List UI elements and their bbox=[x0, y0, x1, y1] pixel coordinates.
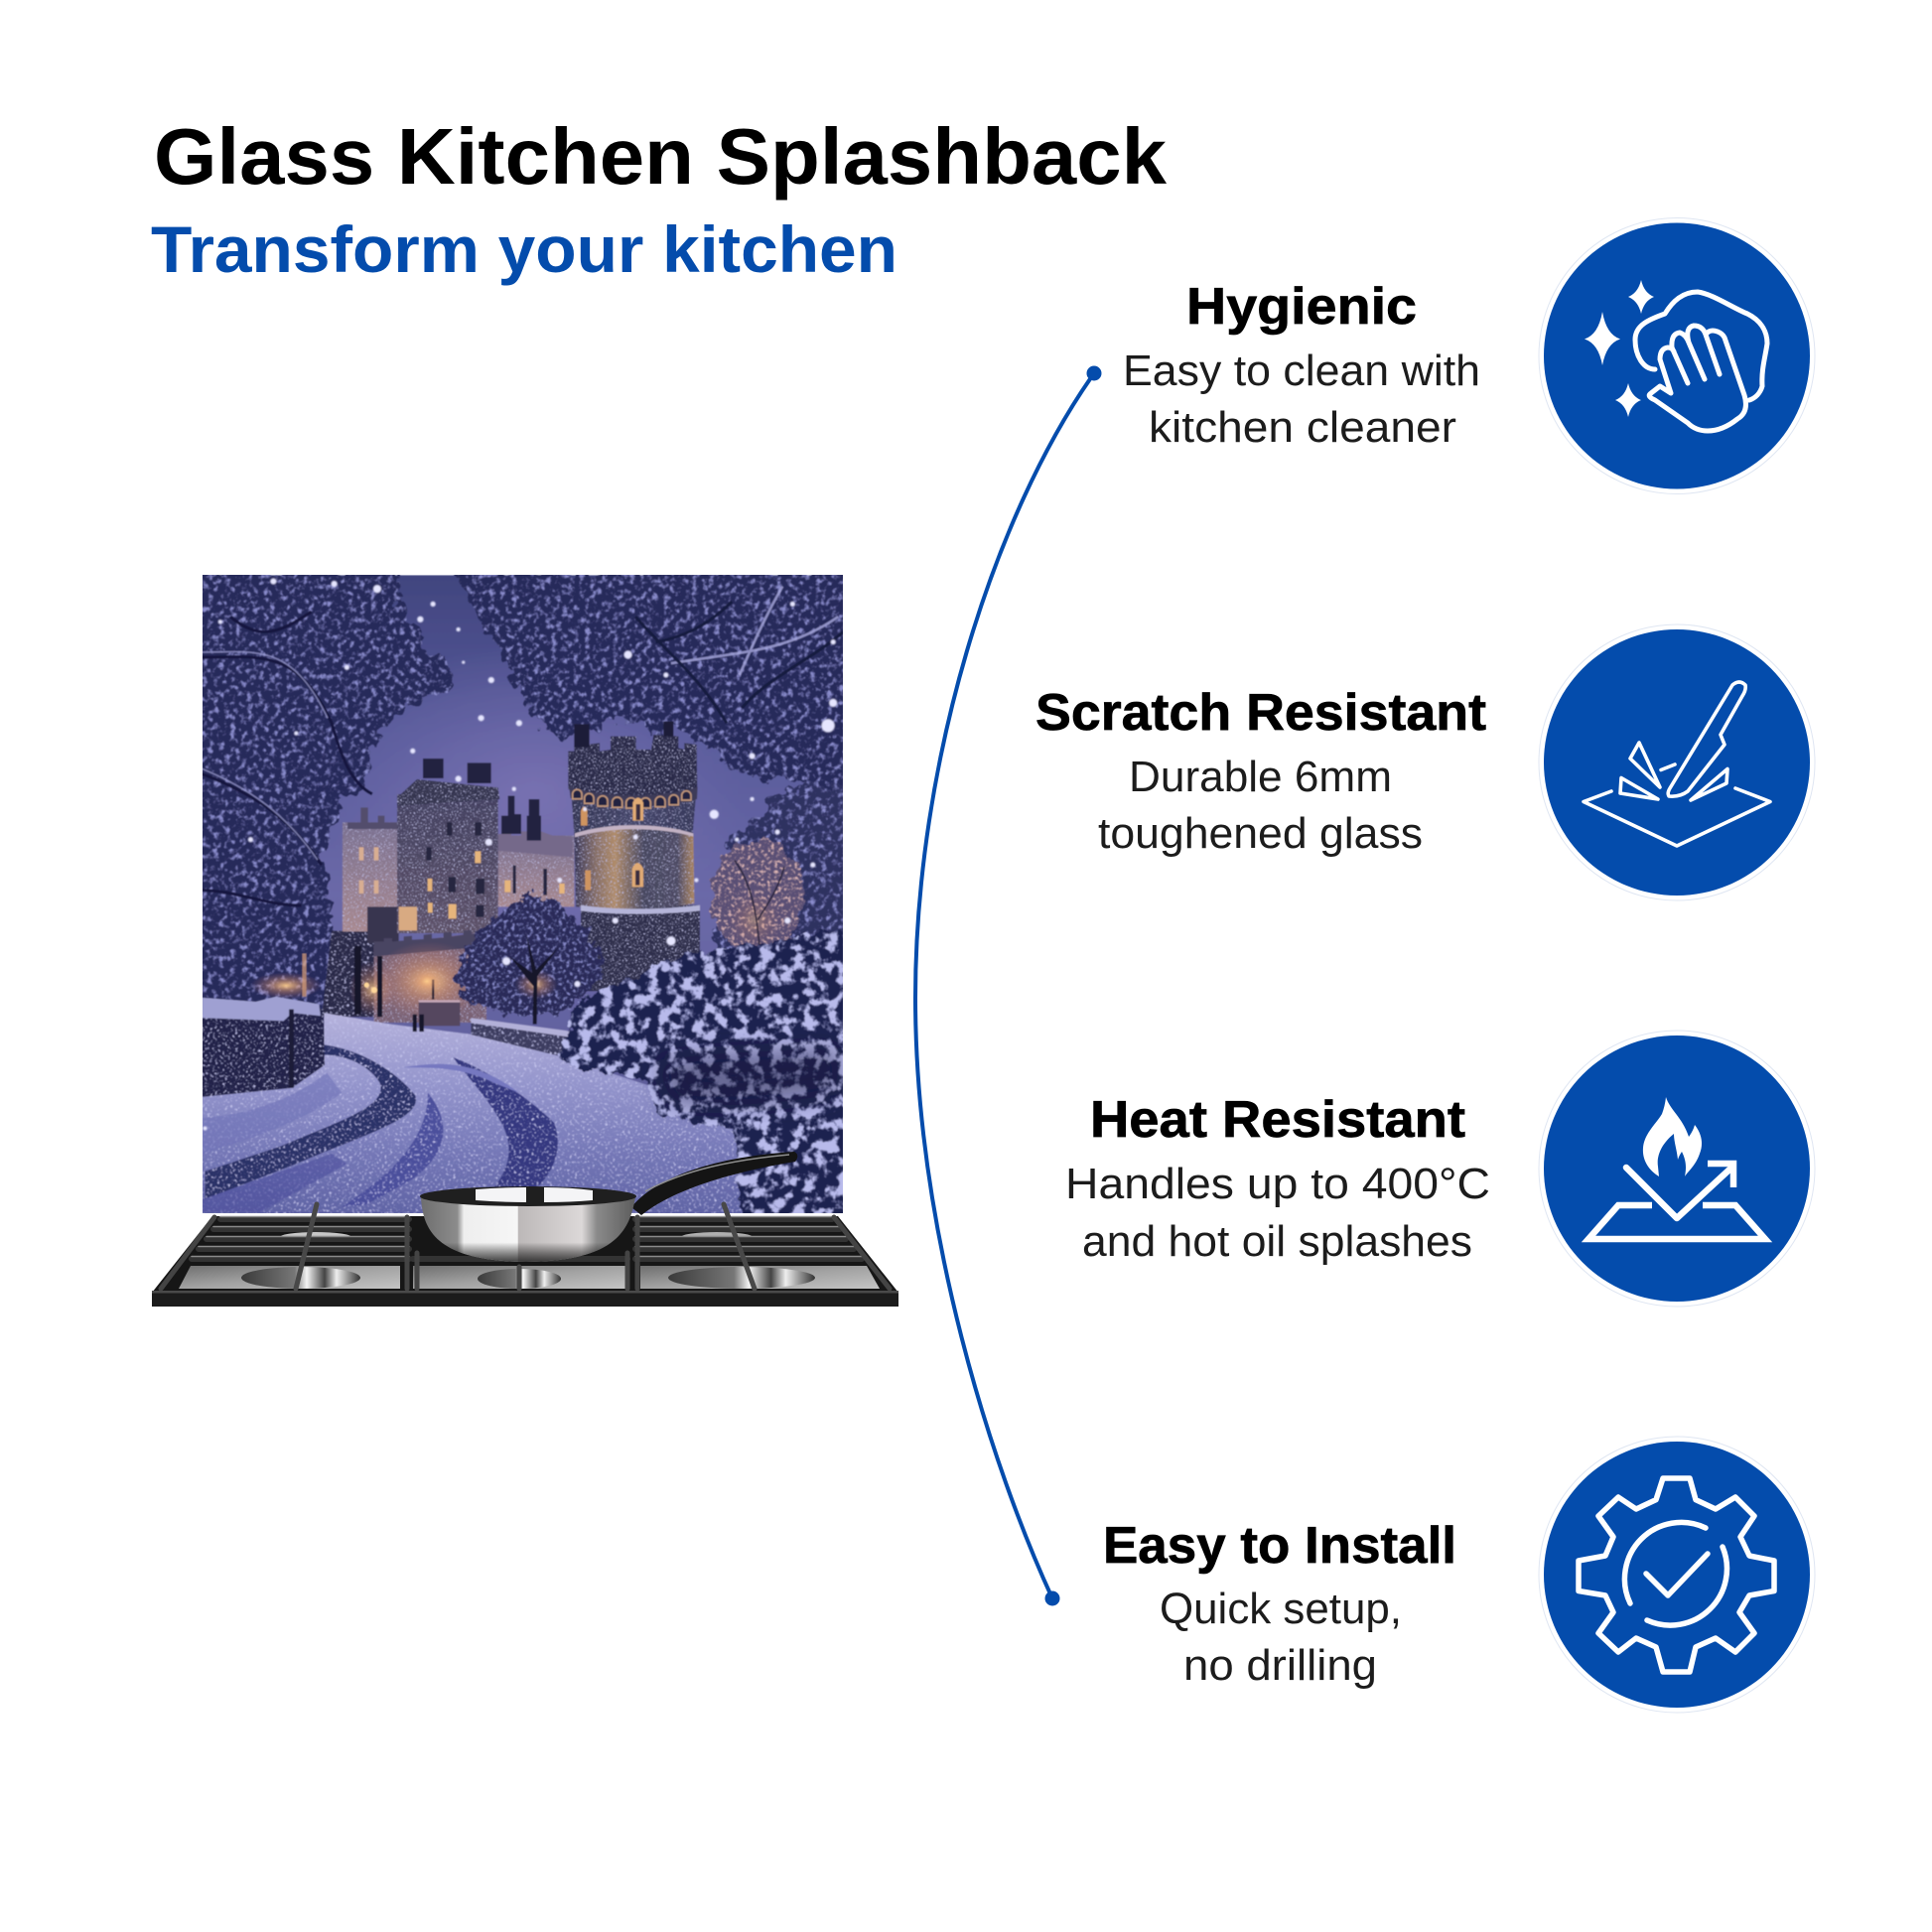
burners bbox=[241, 1232, 815, 1289]
falling snowflakes bbox=[203, 578, 837, 1131]
gas hob bbox=[152, 1204, 898, 1307]
lamps bbox=[250, 946, 395, 1017]
feature: easy to install text: no drilling bbox=[1183, 1641, 1377, 1690]
title: Glass Kitchen Splashback bbox=[154, 112, 1168, 201]
foreground tree bbox=[412, 894, 603, 1025]
steel burner plates bbox=[179, 1266, 880, 1289]
feature: easy to install text: Quick setup, bbox=[1160, 1585, 1402, 1633]
splashback photo: snowy castle bbox=[195, 571, 854, 1219]
feature: heat resistant text bbox=[1065, 1091, 1490, 1266]
people on road bbox=[413, 1015, 424, 1032]
feature: scratch resistant text: Durable 6mm bbox=[1129, 753, 1392, 801]
product image: splashback behind a gas hob bbox=[152, 571, 898, 1307]
castle bbox=[343, 722, 700, 1026]
grate bars bbox=[161, 1204, 890, 1289]
feature: easy to install text bbox=[1103, 1517, 1456, 1690]
lit tree right bbox=[712, 839, 804, 955]
feature: hygienic text: Easy to clean with bbox=[1123, 346, 1480, 395]
feature: hygienic text bbox=[1123, 278, 1480, 452]
feature: scratch resistant text bbox=[1035, 684, 1486, 858]
icon: gear with checkmark bbox=[1539, 1437, 1815, 1713]
frying pan bbox=[420, 1152, 797, 1262]
icon: hand wiping with sparkles bbox=[1539, 218, 1815, 494]
front edge bbox=[152, 1293, 898, 1307]
icon: flame on glass surface bbox=[1539, 1031, 1815, 1307]
subtitle: Transform your kitchen bbox=[151, 212, 897, 286]
feature: scratch resistant text: toughened glass bbox=[1098, 809, 1423, 858]
feature: hygienic text: Hygienic bbox=[1186, 278, 1417, 336]
feature: heat resistant text: Handles up to 400°C bbox=[1065, 1160, 1490, 1208]
snow-covered hedge bbox=[560, 928, 854, 1219]
left stone wall bbox=[202, 997, 325, 1097]
feature: hygienic text: kitchen cleaner bbox=[1149, 403, 1456, 452]
feature: heat resistant text: and hot oil splashes bbox=[1082, 1217, 1472, 1266]
feature: heat resistant text: Heat Resistant bbox=[1090, 1091, 1465, 1149]
icon: knife scratching glass bbox=[1539, 624, 1815, 900]
snowy ground and road bbox=[202, 1013, 762, 1214]
connector curve bbox=[915, 365, 1102, 1606]
feature: scratch resistant text: Scratch Resistant bbox=[1035, 684, 1486, 742]
feature: easy to install text: Easy to Install bbox=[1103, 1517, 1456, 1575]
low bridge wall bbox=[471, 1018, 578, 1057]
